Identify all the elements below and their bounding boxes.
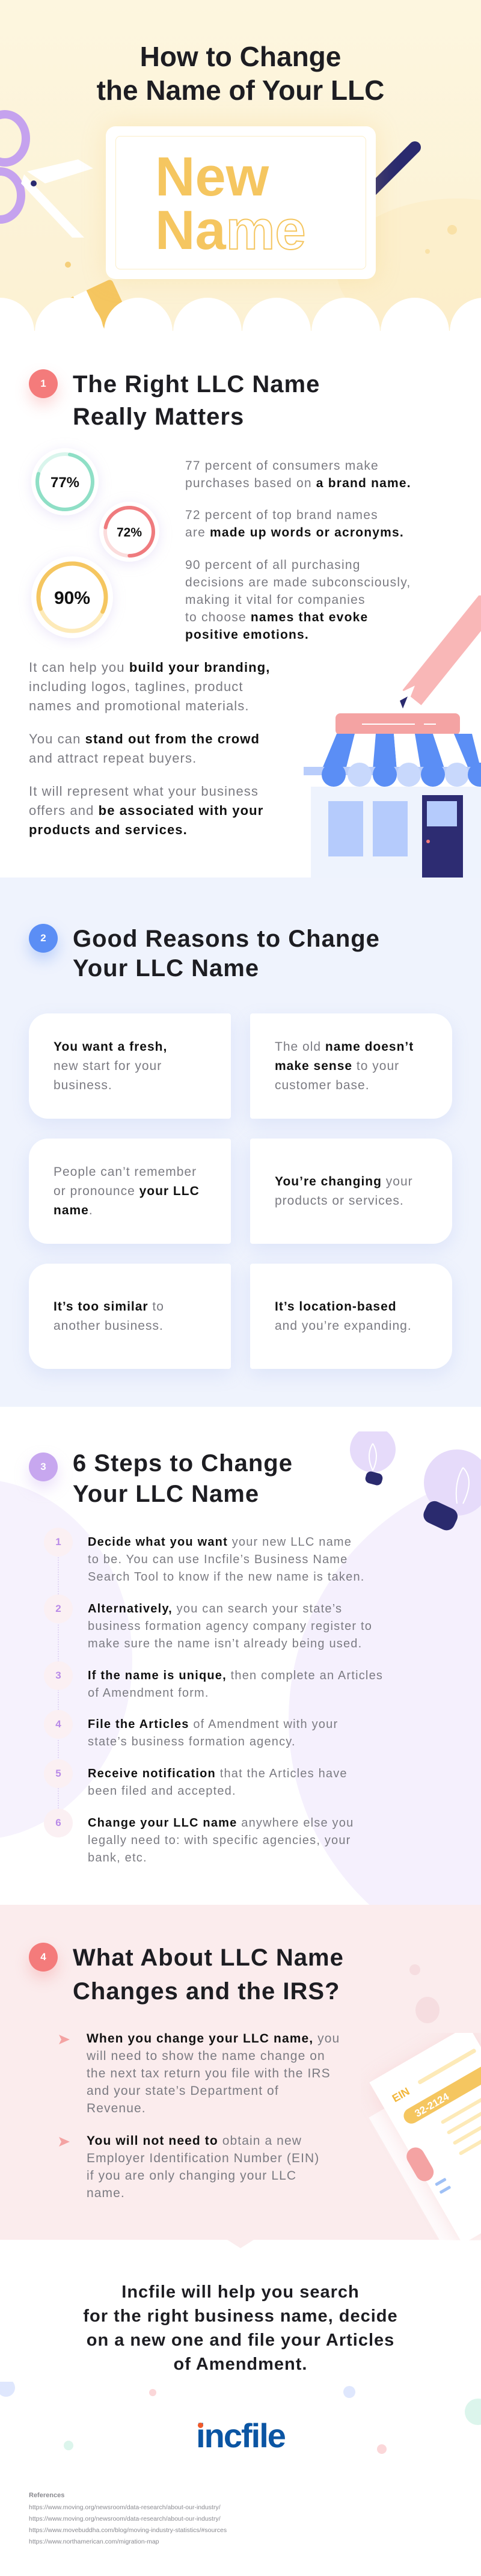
name card: [106, 126, 376, 279]
steps list: business formation agency company register to: [88, 1620, 372, 1633]
card: remember: [29, 1139, 231, 1244]
section 1 header: 1: [40, 378, 46, 389]
dotted step line: [58, 1546, 59, 1822]
section 2 title: [73, 926, 380, 982]
closing statement: Incfile will help you search: [121, 2282, 360, 2302]
pencil: [328, 313, 397, 433]
logo: incfile: incfile: [196, 2417, 285, 2455]
card: old name: customer base.: [275, 1078, 370, 1092]
card: too similar: another business.: [54, 1318, 164, 1333]
text: and attract repeat buyers.: [29, 751, 197, 766]
card: too similar: It’s too similar to: [54, 1299, 164, 1314]
card: changing products: products or services.: [275, 1193, 404, 1208]
illustration: shop with pencil: [304, 595, 481, 878]
section 1 title: Really Matters: [73, 404, 244, 430]
card: old name: make sense to your: [275, 1059, 399, 1073]
section 3 header: 3: [40, 1461, 46, 1472]
icon: lightbulbs: [350, 1431, 481, 1530]
brush right: [310, 147, 415, 263]
icon: arrow bullet: [59, 2137, 70, 2147]
IRS bullet 2: Employer Identification Number (EIN): [87, 2151, 319, 2165]
scissors: [0, 114, 93, 238]
steps list: Search Tool to know if the new name is taken.: [88, 1570, 365, 1584]
references: https://www.moving.org/newsroom/data-research/about-our-industry/: [29, 2504, 221, 2511]
steps list: File the Articles of Amendment with your: [88, 1718, 338, 1731]
rings chart: 72%: [117, 526, 142, 539]
card: too similar: [29, 1264, 231, 1369]
illustration: EIN document: [369, 2033, 481, 2240]
card: fresh start: business.: [54, 1078, 112, 1092]
step 3: [44, 1661, 73, 1690]
text: offers and be associated with your: [29, 803, 263, 818]
section 2 title: Good Reasons to Change: [73, 926, 380, 952]
IRS bullet 2: if you are only changing your LLC: [87, 2169, 296, 2183]
steps list: make sure the name isn’t already being used.: [88, 1637, 362, 1650]
branding texts: including logos, taglines, product: [29, 679, 244, 694]
steps list: Change your LLC name anywhere else you: [88, 1816, 354, 1830]
icon: arrow bullet: [59, 2035, 70, 2044]
references: References: [29, 2492, 64, 2499]
steps list: Decide what you want your new LLC name: [88, 1535, 352, 1549]
branding texts: It can help you build your branding,: [29, 660, 270, 675]
steps list: If the name is unique, then complete an Articles: [88, 1669, 383, 1682]
step 6: [44, 1809, 73, 1837]
section 4 title: [73, 1944, 344, 2005]
rings chart: 90%: [54, 588, 90, 608]
text: You can stand out from the crowd: [29, 731, 260, 746]
text: 72 percent of top brand names: [185, 508, 378, 522]
step 2: [44, 1594, 73, 1623]
paint brush left: [13, 278, 142, 390]
section 3 title: 6 Steps to Change: [73, 1450, 293, 1477]
closing statement: on a new one and file your Articles: [87, 2331, 394, 2350]
stat texts: [185, 459, 411, 490]
branding texts: [29, 660, 270, 713]
IRS bullet 2: You will not need to obtain a new: [87, 2134, 302, 2148]
scalloped edge: [0, 298, 481, 337]
title: How to Change: [140, 41, 341, 72]
step 1: [44, 1528, 73, 1557]
closing statement: of Amendment.: [173, 2355, 307, 2374]
text: positive emotions.: [185, 628, 309, 642]
reason cards: [28, 1013, 453, 1376]
card: fresh start: You want a fresh,: [54, 1039, 167, 1054]
IRS bullet 1: the next tax return you file with the IRS: [87, 2067, 331, 2080]
section 4 header: 4: [40, 1951, 46, 1963]
IRS bullet 1: [59, 2032, 340, 2115]
step 6: 6: [55, 1817, 61, 1828]
section 3 header: [29, 1452, 58, 1481]
IRS bullet 1: Revenue.: [87, 2101, 146, 2115]
text: It will represent what your business: [29, 784, 259, 799]
card: changing products: [250, 1139, 452, 1244]
header background: [0, 0, 481, 337]
text: making it vital for companies: [185, 593, 366, 607]
section 1 title: The Right LLC Name: [73, 371, 320, 398]
section 4 header: [29, 1943, 58, 1972]
text: 90 percent of all purchasing: [185, 558, 361, 572]
illustration: EIN document: 32-2124: [413, 2091, 452, 2120]
card: remember: name.: [54, 1203, 93, 1217]
section 2 header: 2: [40, 932, 46, 944]
closing statement: for the right business name, decide: [83, 2307, 398, 2326]
step 4: [44, 1710, 73, 1739]
steps list: [44, 1528, 383, 1864]
section 4 title: Changes and the IRS?: [73, 1978, 340, 2005]
IRS bullet 1: and your state’s Department of: [87, 2084, 279, 2098]
card: location: and you’re expanding.: [275, 1318, 412, 1333]
references: [29, 2492, 227, 2545]
references: https://www.movebuddha.com/blog/moving-industry-statistics/#sources: [29, 2527, 227, 2534]
step 4: 4: [55, 1718, 61, 1730]
stat texts: 77 percent of consumers make: [185, 459, 379, 473]
steps list: to be. You can use Incfile’s Business Name: [88, 1553, 348, 1566]
text: decisions are made subconsciously,: [185, 576, 411, 589]
steps list: Alternatively, you can search your state’s: [88, 1602, 342, 1615]
card: fresh start: [29, 1013, 231, 1119]
card: remember: or pronounce your LLC: [54, 1184, 200, 1198]
section 4 title: What About LLC Name: [73, 1944, 344, 1971]
card: location: It’s location-based: [275, 1299, 397, 1314]
step 3: 3: [55, 1670, 61, 1681]
section 3 background blobs: [0, 1481, 481, 1905]
section 3 title: Your LLC Name: [73, 1481, 259, 1507]
step 2: 2: [55, 1603, 61, 1614]
card: fresh start: new start for your: [54, 1059, 162, 1073]
new name text: [155, 146, 306, 261]
step 5: 5: [55, 1768, 61, 1779]
new name text: Name: [155, 200, 306, 261]
IRS bullet 2: [59, 2134, 319, 2200]
section 1 header: [29, 369, 58, 398]
title: [97, 41, 384, 106]
closing statement: [83, 2282, 398, 2374]
references: https://www.moving.org/newsroom/data-research/about-our-industry/: [29, 2515, 221, 2522]
IRS bullet 2: name.: [87, 2186, 125, 2200]
section 2 header: [29, 924, 58, 953]
card: old name: [250, 1013, 452, 1119]
rings chart: [29, 452, 161, 642]
card: remember: People can’t remember: [54, 1164, 197, 1179]
section 3 title: [73, 1450, 293, 1507]
steps list: been filed and accepted.: [88, 1784, 236, 1798]
steps list: of Amendment form.: [88, 1686, 209, 1700]
decorative dots: [0, 2382, 481, 2454]
text: products and services.: [29, 822, 188, 837]
text: to choose names that evoke: [185, 610, 368, 624]
card: location: [250, 1264, 452, 1369]
card: changing products: You’re changing your: [275, 1174, 413, 1188]
section 2 title: Your LLC Name: [73, 955, 259, 982]
text: are made up words or acronyms.: [185, 526, 404, 539]
new name text: New: [155, 146, 269, 207]
IRS bullet 1: When you change your LLC name, you: [87, 2032, 340, 2046]
step 1: 1: [55, 1536, 61, 1548]
illustration: EIN document: EIN: [390, 2085, 412, 2104]
stat texts: purchases based on a brand name.: [185, 476, 411, 490]
steps list: Receive notification that the Articles have: [88, 1767, 348, 1780]
title: the Name of Your LLC: [97, 75, 384, 106]
IRS bullet 1: will need to show the name change on: [87, 2049, 325, 2063]
steps list: legally need to: with specific agencies, your: [88, 1834, 351, 1847]
card: old name: The old name doesn’t: [275, 1039, 414, 1054]
section 2 background: [0, 878, 481, 1407]
step 5: [44, 1759, 73, 1788]
section 4 background: [0, 1905, 481, 2248]
rings chart: 77%: [51, 475, 79, 491]
section 1 title: [73, 371, 320, 430]
branding texts: names and promotional materials.: [29, 698, 250, 713]
references: https://www.northamerican.com/migration-map: [29, 2538, 159, 2545]
header decorations: [0, 110, 481, 331]
text: bank, etc.: [88, 1851, 147, 1864]
steps list: state’s business formation agency.: [88, 1735, 296, 1748]
